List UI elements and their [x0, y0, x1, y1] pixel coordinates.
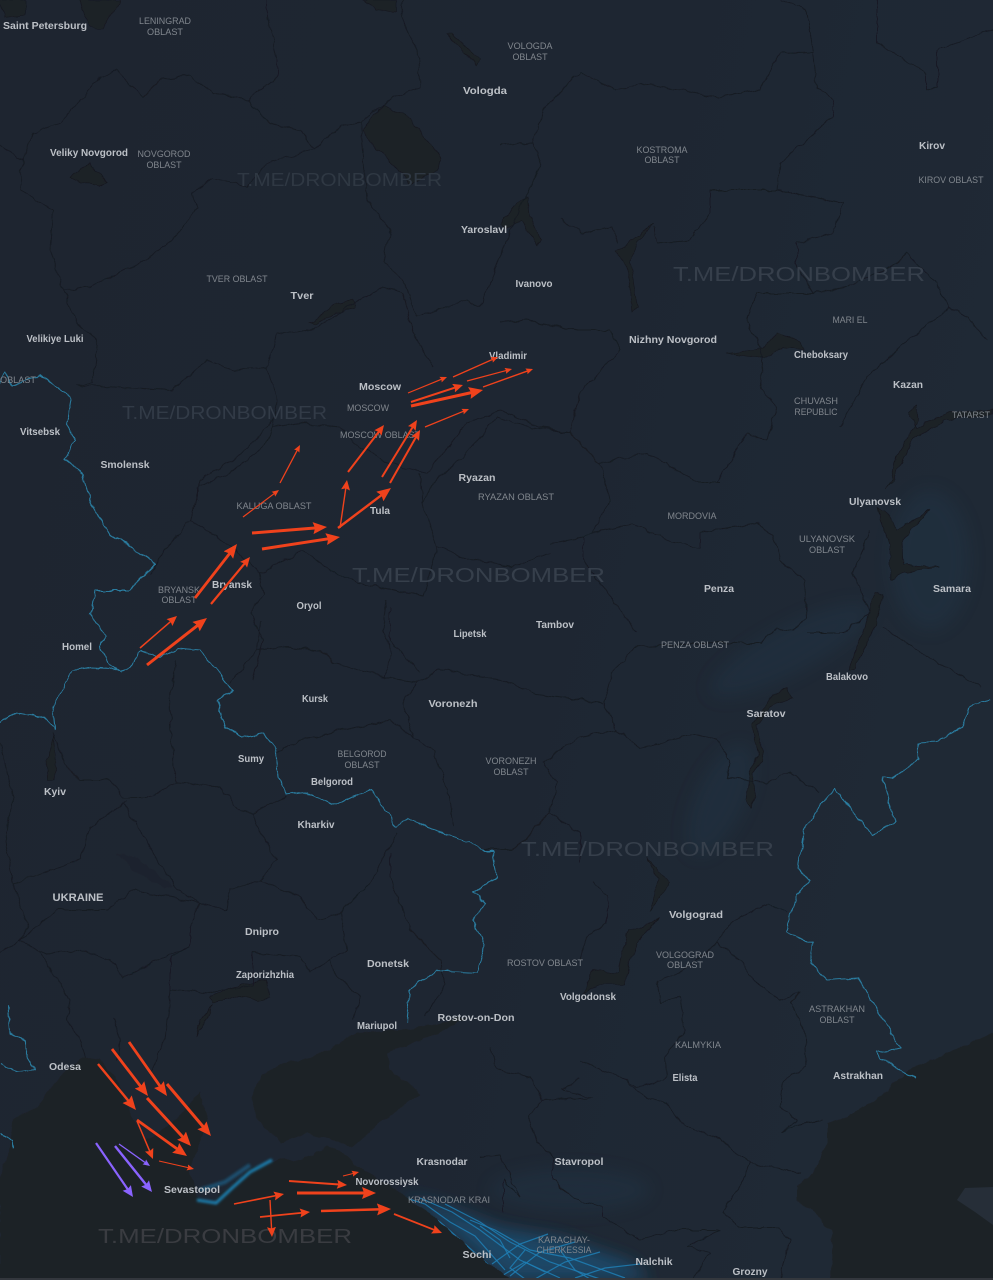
city labels: Vologda	[463, 85, 507, 97]
city labels: Volgodonsk	[560, 991, 616, 1003]
city labels: Penza	[704, 583, 734, 595]
oblast labels: MARI EL	[832, 315, 868, 325]
oblast labels: OBLAST	[344, 760, 380, 770]
city labels: Zaporizhzhia	[236, 969, 294, 981]
city labels: Grozny	[732, 1266, 768, 1278]
city labels: Astrakhan	[833, 1070, 883, 1082]
city labels: Moscow	[359, 381, 402, 393]
city labels: Stavropol	[554, 1156, 604, 1168]
oblast labels: PENZA OBLAST	[661, 640, 729, 650]
city labels: Donetsk	[367, 958, 409, 970]
Kara-Bogaz land patch	[957, 1187, 993, 1225]
city labels: Sumy	[238, 753, 264, 765]
Sea of Azov	[250, 1015, 470, 1147]
city labels: Smolensk	[100, 459, 150, 471]
city labels: Volgograd	[669, 909, 723, 921]
city labels: Sevastopol	[164, 1184, 220, 1196]
oblast labels: OBLAST	[820, 1015, 855, 1025]
watermark: upper right: T.ME/DRONBOMBER	[673, 264, 925, 286]
Caspian Sea	[797, 1030, 993, 1280]
oblast labels: KOSTROMA	[636, 145, 688, 155]
city labels: Novorossiysk	[356, 1176, 419, 1188]
watermark: centre: T.ME/DRONBOMBER	[352, 565, 605, 587]
city labels: Mariupol	[357, 1020, 397, 1032]
oblast labels: NOVGOROD	[138, 149, 191, 159]
city labels: Homel	[62, 641, 92, 653]
city labels: Nizhny Novgorod	[629, 334, 717, 346]
Crimea coast glow	[197, 1160, 272, 1203]
oblast labels: CHUVASH	[794, 396, 838, 406]
city labels: Odesa	[49, 1061, 81, 1073]
city labels: Oryol	[296, 600, 322, 612]
city labels: Bryansk	[212, 579, 252, 591]
city labels: Voronezh	[428, 698, 478, 710]
city labels: Nalchik	[636, 1256, 673, 1268]
oblast labels: KIROV OBLAST	[918, 175, 984, 185]
city labels: Ivanovo	[516, 278, 552, 290]
city labels: Dnipro	[245, 926, 279, 938]
city labels: Ryazan	[458, 472, 496, 484]
oblast labels: BRYANSK	[158, 585, 200, 595]
city labels: Balakovo	[826, 671, 868, 683]
purple arrows: western approach	[96, 1143, 152, 1197]
city labels: Kursk	[302, 693, 328, 705]
city labels: Ulyanovsk	[849, 496, 901, 508]
oblast labels: LENINGRAD	[139, 16, 191, 26]
oblast labels: BELGOROD	[338, 749, 387, 759]
watermark: lower right: T.ME/DRONBOMBER	[521, 839, 774, 861]
oblast labels: VORONEZH	[486, 756, 536, 766]
city labels: Krasnodar	[416, 1156, 468, 1168]
oblast labels: KARACHAY-	[538, 1235, 590, 1245]
international border	[0, 372, 990, 1148]
city labels: Kharkiv	[298, 819, 335, 831]
terrain glow: Volga steppe	[490, 490, 970, 1212]
city labels: Saratov	[746, 708, 786, 720]
oblast labels: OBLAST	[162, 595, 197, 605]
seas with shorelines	[0, 1015, 993, 1280]
oblast labels: KALMYKIA	[675, 1040, 721, 1050]
oblast labels: KALUGA OBLAST	[236, 501, 312, 511]
oblast labels: TATARST	[952, 410, 990, 420]
oblast labels: OBLAST	[809, 545, 846, 555]
oblast labels: MORDOVIA	[668, 511, 716, 521]
oblast labels: OBLAST	[147, 27, 184, 37]
watermark: upper left: T.ME/DRONBOMBER	[122, 403, 327, 423]
oblast labels: MOSCOW OBLAST	[340, 430, 420, 440]
city labels: Yaroslavl	[461, 224, 507, 236]
oblast labels: VOLOGDA	[508, 41, 552, 51]
city labels: Tver	[290, 290, 314, 302]
city labels: Sochi	[462, 1249, 492, 1261]
oblast labels: OBLAST	[494, 767, 529, 777]
city labels: Vladimir	[489, 350, 527, 362]
bottom edge strip	[0, 1278, 993, 1280]
city labels: Saint Petersburg	[3, 20, 87, 32]
Black Sea	[0, 1058, 512, 1280]
city labels: Kyiv	[44, 786, 66, 798]
city labels: Belgorod	[311, 776, 353, 788]
oblast labels: OBLAST	[146, 160, 182, 170]
city labels: Lipetsk	[454, 628, 487, 640]
city labels: Veliky Novgorod	[50, 147, 128, 159]
oblast labels: OBLAST	[667, 960, 704, 970]
city labels: Samara	[933, 583, 971, 595]
city labels: UKRAINE	[52, 892, 104, 904]
oblast labels: VOLGOGRAD	[656, 950, 714, 960]
oblast labels: MOSCOW	[347, 403, 389, 413]
city labels: Elista	[672, 1072, 698, 1084]
oblast labels: ASTRAKHAN	[809, 1004, 865, 1014]
terrain glow: Caucasus	[400, 1195, 650, 1280]
watermark: top: T.ME/DRONBOMBER	[237, 170, 442, 190]
red arrows: route toward Novorossiysk and Sochi	[234, 1172, 442, 1237]
city labels: Kirov	[919, 140, 945, 152]
city labels: Vitsebsk	[20, 426, 60, 438]
oblast labels: OBLAST	[644, 155, 680, 165]
city labels: Cheboksary	[794, 349, 848, 361]
city labels: Kazan	[893, 379, 923, 391]
oblast labels: ROSTOV OBLAST	[507, 958, 583, 968]
red arrows: route toward Crimea	[98, 1042, 211, 1169]
city labels: Rostov-on-Don	[438, 1012, 514, 1024]
oblast labels: CHERKESSIA	[536, 1245, 592, 1255]
oblast labels: REPUBLIC	[794, 407, 838, 417]
red arrows: northern route toward Moscow and Vladimir	[140, 357, 533, 665]
city labels: Tula	[370, 505, 390, 517]
oblast labels: TVER OBLAST	[206, 274, 268, 284]
oblast labels: OBLAST	[0, 375, 37, 385]
oblast labels: KRASNODAR KRAI	[408, 1195, 490, 1205]
city labels: Velikiye Luki	[26, 333, 84, 345]
oblast labels: RYAZAN OBLAST	[478, 492, 555, 502]
watermark: bottom: T.ME/DRONBOMBER	[98, 1226, 352, 1248]
city labels: Tambov	[536, 619, 574, 631]
oblast labels: ULYANOVSK	[799, 534, 855, 544]
oblast labels: OBLAST	[512, 52, 548, 62]
